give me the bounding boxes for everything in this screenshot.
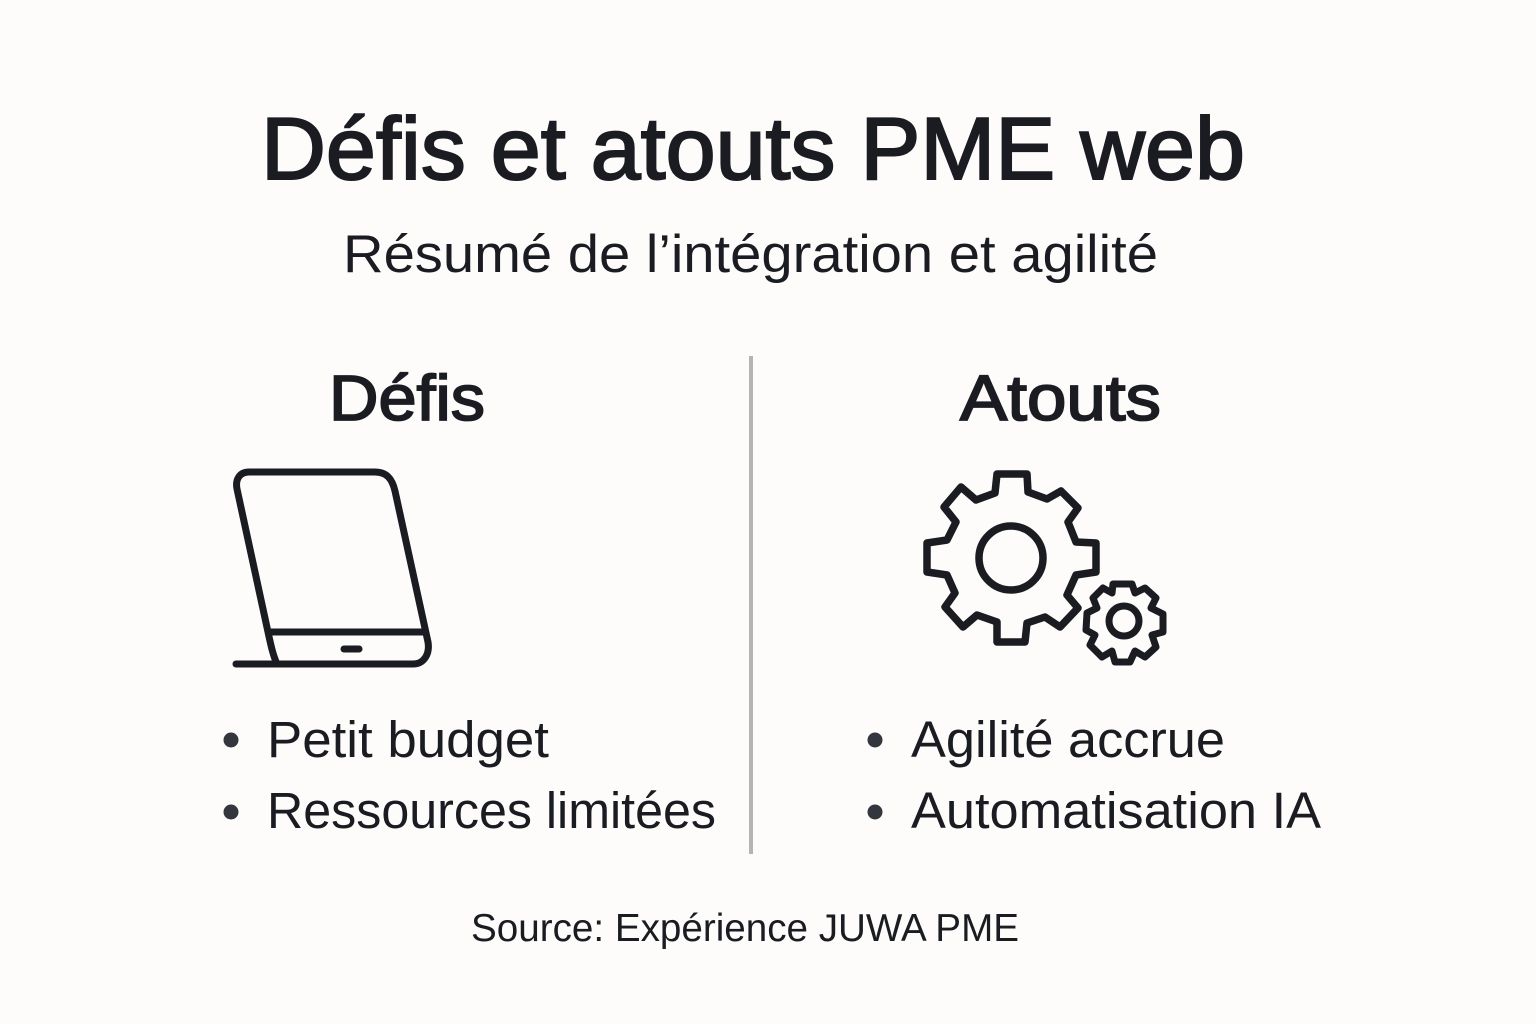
vertical divider [749,356,753,854]
heading: atouts: Atouts [960,362,1161,434]
panel: défis [224,362,716,839]
list: atouts [868,711,1321,839]
icon: laptop [236,472,428,664]
panel: atouts [868,362,1321,839]
list: défis [224,711,716,839]
bullet item: petit budget: Petit budget [267,711,549,768]
title: Défis et atouts PME web [261,99,1245,198]
bullet item: automatisation ia: Automatisation IA [911,782,1321,839]
source note: Source: Expérience JUWA PME [471,907,1019,950]
heading: défis: Défis [329,362,485,434]
icon: gears [927,474,1163,662]
large gear [927,474,1096,642]
bullet item: agilité accrue: Agilité accrue [911,711,1225,768]
bullet item: ressources limitées: Ressources limitées [267,782,716,839]
subtitle: Résumé de l’intégration et agilité [343,225,1158,284]
small gear [1086,584,1163,662]
